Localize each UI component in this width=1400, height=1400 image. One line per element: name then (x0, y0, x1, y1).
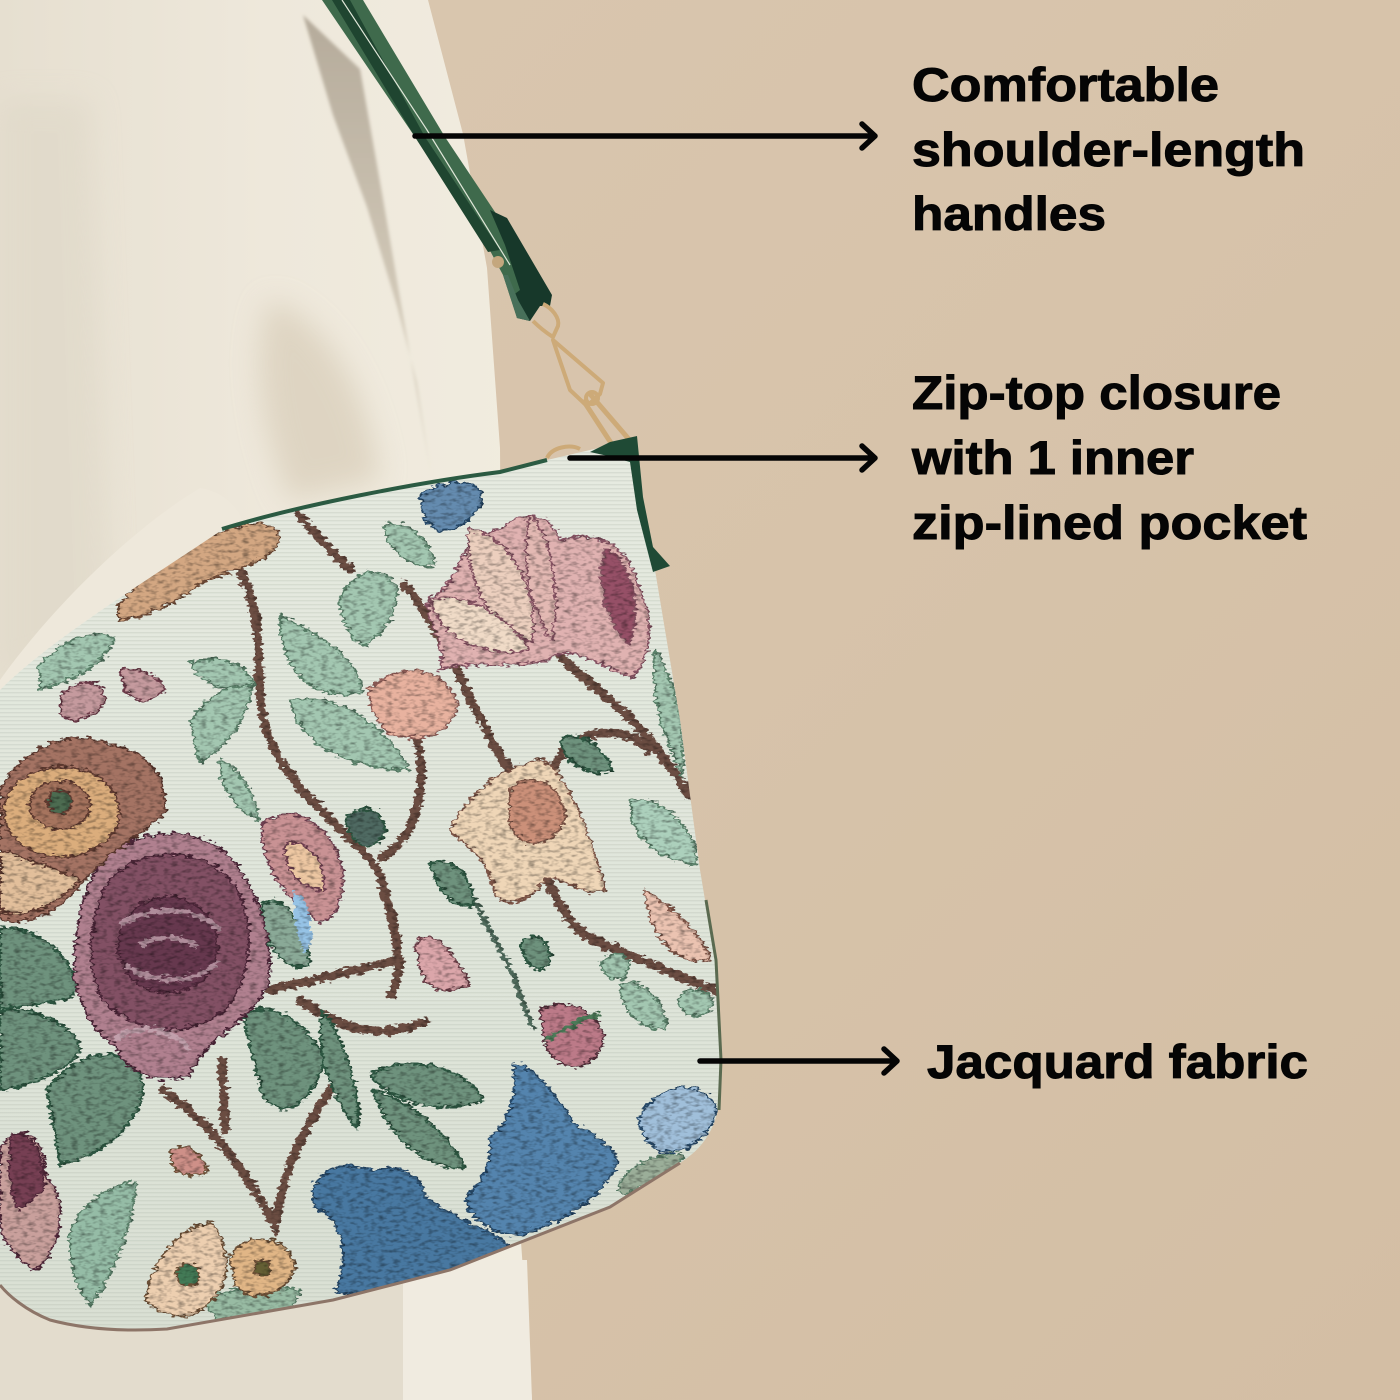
morning flower (415, 937, 470, 990)
floral jacquard pattern (0, 483, 718, 1320)
bag body (0, 436, 721, 1330)
gold clasp (533, 304, 633, 458)
fabric ribbing (0, 440, 721, 1330)
callout: handles (415, 58, 1318, 240)
cream blossoms (145, 1147, 295, 1316)
golden peony (0, 738, 165, 922)
zipper edge (222, 460, 547, 529)
blue petal (293, 892, 313, 954)
arrow: handles (415, 124, 875, 148)
label: zip closure: Zip-top closure (912, 366, 1281, 419)
callout: fabric (700, 1035, 1308, 1088)
pink bud lower (540, 1004, 605, 1067)
pink bud (368, 671, 458, 738)
light sage leaves (40, 524, 713, 1320)
purple peony (74, 834, 270, 1079)
arrow: fabric (700, 1049, 897, 1073)
blue lilac clusters (313, 483, 717, 1297)
small maroon flowers left (60, 669, 165, 720)
left lower flower (0, 1133, 60, 1270)
arrow: zip closure (570, 446, 875, 470)
small rose (262, 814, 343, 923)
magnolia flower (428, 515, 649, 677)
dark green leaves (0, 736, 612, 1168)
central peach flower (450, 760, 605, 902)
label: zip closure: with 1 inner (911, 431, 1194, 484)
shoulder strap (322, 0, 552, 321)
callout: zip closure (570, 366, 1307, 549)
stems (163, 515, 718, 1225)
label: handles: shoulder-length (912, 123, 1305, 176)
pink flower right (645, 890, 710, 961)
bag bottom edge (0, 1163, 680, 1330)
label: handles: handles (912, 187, 1106, 240)
label: handles: Comfortable (912, 58, 1219, 111)
tan flower upper left (118, 523, 280, 620)
label: zip closure: zip-lined pocket (912, 496, 1307, 549)
zip pull (590, 436, 670, 572)
label: fabric: Jacquard fabric (927, 1035, 1308, 1088)
bag right seam (706, 900, 721, 1110)
linen shirt (0, 0, 532, 1400)
